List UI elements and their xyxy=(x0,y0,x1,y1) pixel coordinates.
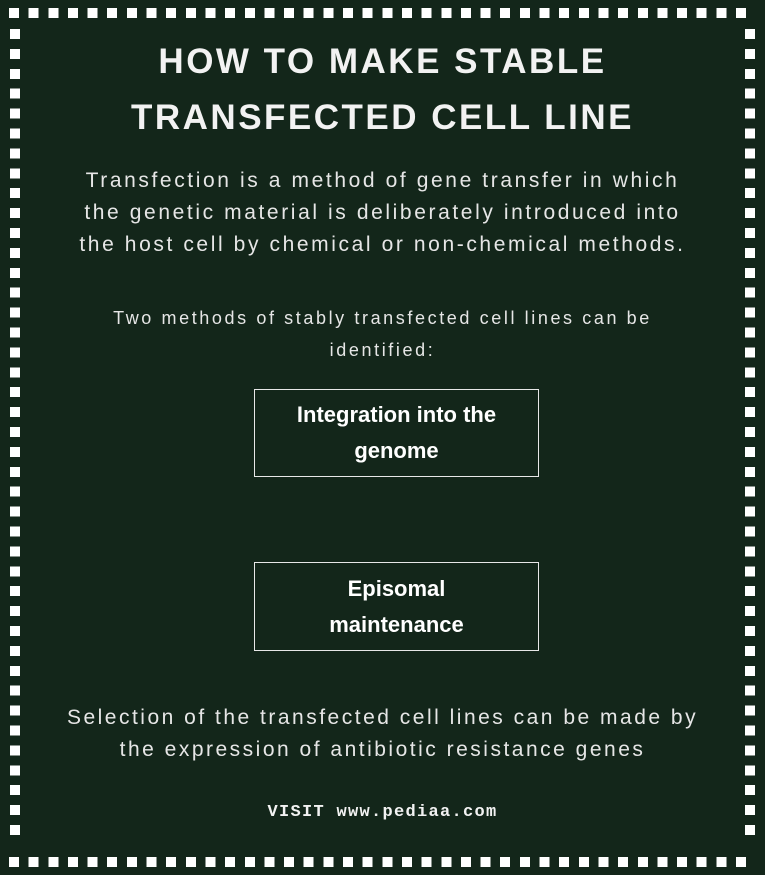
box: integration into the genome xyxy=(254,389,539,477)
intro text: Transfection is a method of gene transfer in which xyxy=(86,169,679,192)
selection text: Selection of the transfected cell lines can be made by xyxy=(67,706,698,729)
title xyxy=(131,42,634,137)
title: HOW TO MAKE STABLE xyxy=(158,42,607,81)
box: integration into the genome: genome xyxy=(354,438,439,463)
methods intro xyxy=(113,308,652,360)
selection text xyxy=(67,706,698,761)
box: episomal maintenance: Episomal xyxy=(348,576,445,600)
box: integration into the genome: Integration into the xyxy=(297,402,496,427)
intro text: the genetic material is deliberately introduced into xyxy=(84,201,681,224)
methods intro: identified: xyxy=(330,340,435,360)
footer link: VISIT www.pediaa.com xyxy=(267,803,498,822)
intro text: the host cell by chemical or non-chemical methods. xyxy=(79,233,686,256)
box: episomal maintenance: maintenance xyxy=(329,612,464,636)
intro text xyxy=(79,169,686,256)
selection text: the expression of antibiotic resistance genes xyxy=(120,738,645,761)
methods intro: Two methods of stably transfected cell lines can be xyxy=(113,308,652,328)
title: TRANSFECTED CELL LINE xyxy=(131,98,634,137)
box: episomal maintenance xyxy=(254,562,539,651)
